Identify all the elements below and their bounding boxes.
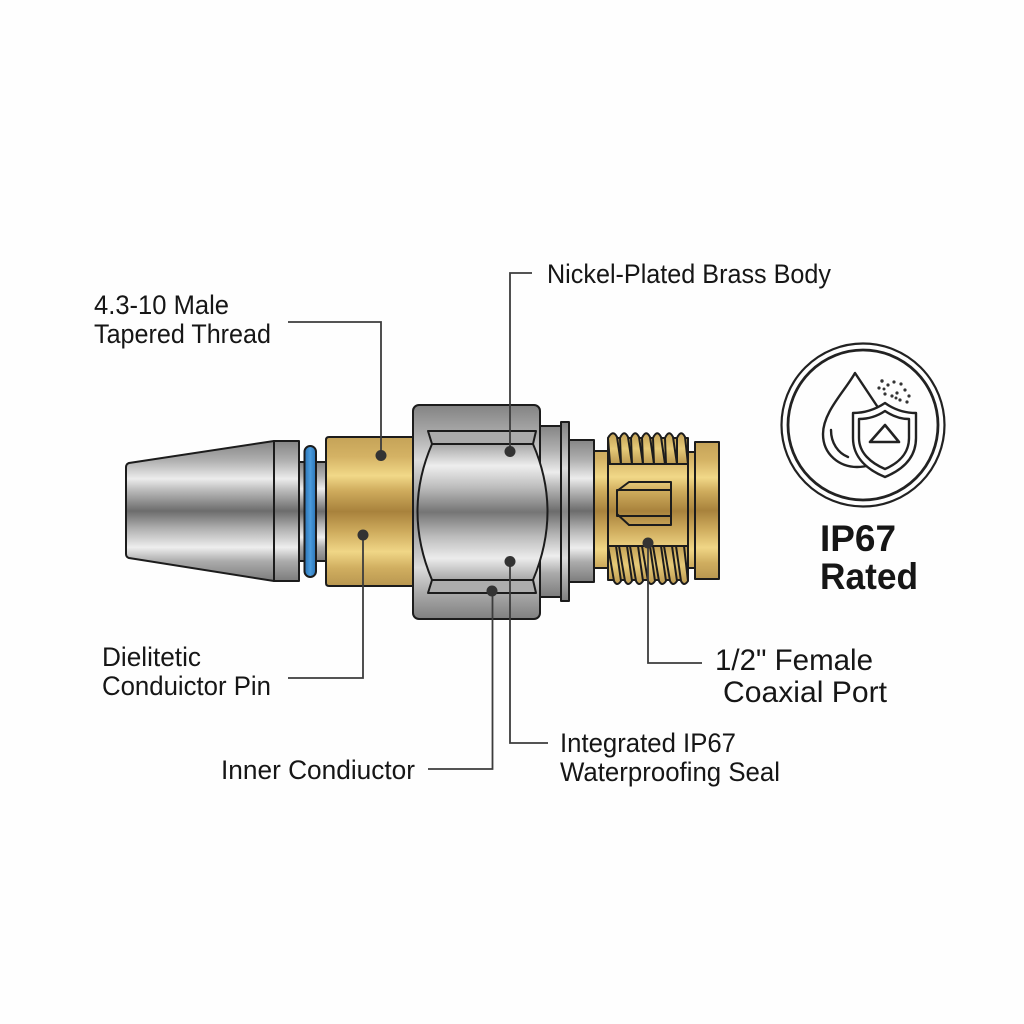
wrench slot [617,482,671,525]
label: 4.3-10 male tapered thread [94,290,271,349]
label: dielitetic conduictor pin: Conduictor Pin [102,671,271,701]
hex nut body [413,405,540,619]
end flange [695,442,719,579]
icon: IP67 water drop and shield badge [782,344,944,506]
badge text: IP67 rated: IP67 [820,518,896,559]
label: 1/2 inch female coaxial port: 1/2" Female [715,644,873,677]
rear metal barrel [569,440,594,582]
brass neck right [687,452,696,568]
hex nut top facet [428,431,536,444]
label: inner condiuctor: Inner Condiuctor [221,755,415,785]
flange ring [561,422,569,601]
label: 4.3-10 male tapered thread: Tapered Thread [94,319,271,349]
label: dielitetic conduictor pin [102,642,271,701]
connector assembly [126,405,719,619]
slot inner flat [617,490,671,516]
label: integrated ip67 waterproofing seal [560,728,780,787]
badge text: IP67 rated [820,518,918,597]
neck behind o-ring [298,462,327,561]
brass threaded core [608,464,688,546]
leader lines [288,273,702,769]
brass sleeve [326,437,414,586]
lower thread ridges [608,546,688,584]
label: integrated ip67 waterproofing seal: Integrated IP67 [560,728,736,758]
label: integrated ip67 waterproofing seal: Waterproofing Seal [560,757,780,787]
brass neck [594,451,609,568]
rear metal collar [538,426,562,597]
hex nut bottom facet [428,580,536,593]
label: dielitetic conduictor pin: Dielitetic [102,642,201,672]
hex nut bulged face [418,444,548,580]
label: 1/2 inch female coaxial port [715,644,888,709]
label: 1/2 inch female coaxial port: Coaxial Port [723,676,888,709]
collar [274,441,299,581]
upper thread ridges [608,433,688,464]
callout dots [358,446,654,596]
label: 4.3-10 male tapered thread: 4.3-10 Male [94,290,229,320]
badge text: IP67 rated: Rated [820,556,918,597]
label: nickel-plated brass body: Nickel-Plated Brass Body [547,259,832,289]
blue o-ring [304,446,316,577]
4.3-10 tapered cone [126,441,274,581]
